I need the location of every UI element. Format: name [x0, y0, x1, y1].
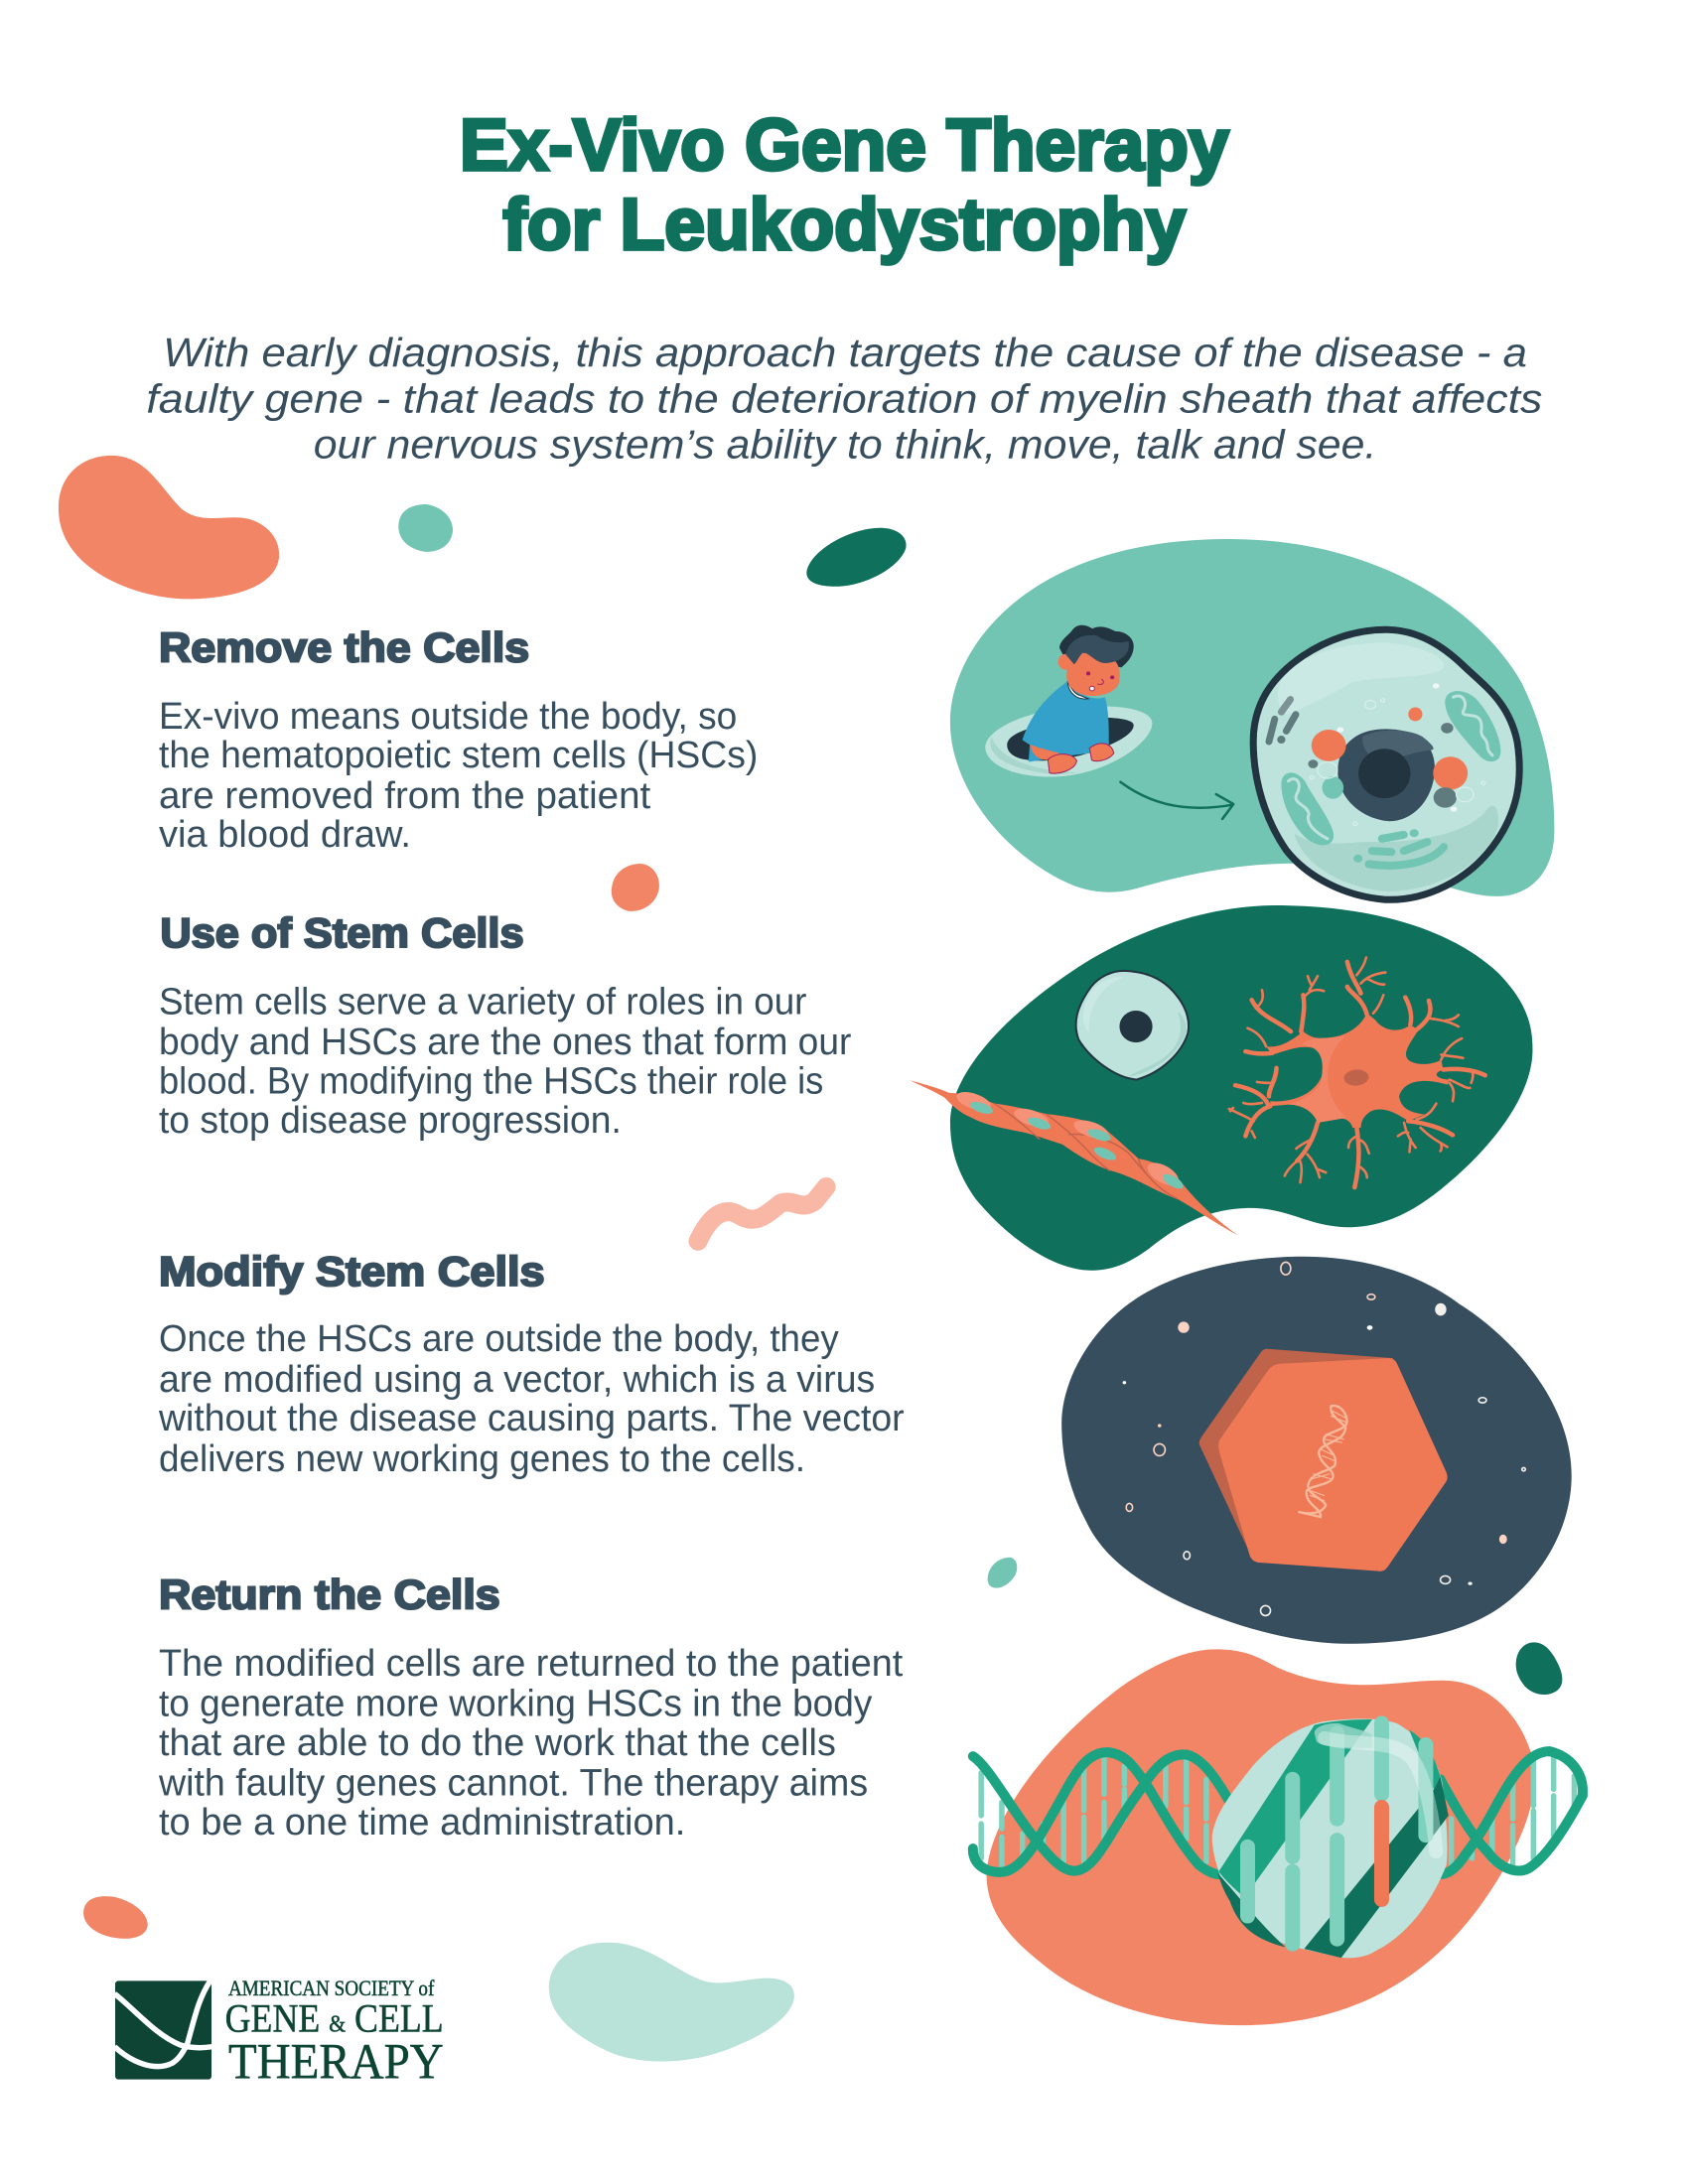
logo icon: [114, 1980, 211, 2080]
navy blob: [1061, 1257, 1572, 1644]
illustration: orange blob with DNA and lens: [973, 1649, 1583, 2025]
animal cell: [1253, 629, 1519, 899]
DNA strands: [973, 1751, 1583, 1874]
decorative blob: orange dot: [612, 864, 659, 911]
body text: [158, 1318, 905, 1480]
intro text: With early diagnosis, this approach targets the cause of the disease - a: [163, 330, 1527, 375]
body text: Once the HSCs are outside the body, they: [159, 1318, 839, 1360]
dark green blob: [950, 905, 1532, 1271]
specks: [1123, 1262, 1525, 1615]
title: Ex-Vivo Gene Therapy: [460, 105, 1229, 186]
muscle cell: [910, 1080, 1238, 1236]
body text: The modified cells are returned to the patient: [159, 1643, 904, 1685]
body text: are modified using a vector, which is a virus: [159, 1359, 875, 1401]
magnifying lens: [1212, 1718, 1449, 1958]
body text: with faulty genes cannot. The therapy aims: [158, 1763, 868, 1805]
heading: Use of Stem Cells: [160, 909, 524, 956]
logo: American Society of Gene & Cell Therapy: [114, 1976, 444, 2089]
body text: the hematopoietic stem cells (HSCs): [159, 735, 758, 776]
body text: Stem cells serve a variety of roles in our: [159, 982, 806, 1024]
logo wordmark: THERAPY: [228, 2033, 444, 2089]
mini DNA: [1299, 1406, 1347, 1517]
DNA rungs: [981, 1758, 1574, 1866]
decorative blob: orange top left: [59, 456, 279, 599]
logo wordmark: GENE & CELL: [225, 1997, 444, 2041]
body text: to stop disease progression.: [159, 1100, 622, 1142]
body text: [159, 696, 758, 856]
body text: that are able to do the work that the cells: [159, 1722, 836, 1764]
stem cell: [1076, 971, 1189, 1080]
intro text: [146, 330, 1542, 468]
title: [460, 105, 1229, 265]
logo wordmark: AMERICAN SOCIETY of: [228, 1976, 435, 2000]
hexagon capsid: [1218, 1358, 1448, 1571]
decorative blob: dark green right: [1516, 1642, 1562, 1695]
body text: via blood draw.: [159, 814, 411, 856]
decorative blob: small teal lower: [988, 1558, 1017, 1588]
heading: Return the Cells: [159, 1571, 500, 1618]
title: for Leukodystrophy: [503, 185, 1187, 265]
body text: Ex-vivo means outside the body, so: [159, 696, 737, 738]
heading: Modify Stem Cells: [159, 1248, 545, 1295]
decorative blob: small teal: [398, 504, 453, 552]
arrow: [1120, 782, 1233, 819]
text block: Remove the Cells: [159, 624, 758, 856]
body text: body and HSCs are the ones that form our: [159, 1022, 851, 1063]
text block: Return the Cells: [158, 1571, 904, 1843]
intro text: faulty gene - that leads to the deterioration of myelin sheath that affects: [146, 375, 1542, 421]
body text: delivers new working genes to the cells.: [159, 1438, 805, 1480]
body text: without the disease causing parts. The vector: [158, 1398, 905, 1439]
body text: [158, 1643, 904, 1843]
logo wordmark: [225, 1976, 444, 2089]
decorative blob: pale teal bottom: [549, 1943, 794, 2062]
intro text: our nervous system’s ability to think, move, talk and see.: [314, 422, 1376, 468]
body text: are removed from the patient: [159, 775, 651, 817]
illustration: teal blob with patient and cell: [950, 539, 1554, 899]
body text: to generate more working HSCs in the body: [159, 1684, 872, 1725]
text block: Modify Stem Cells: [158, 1248, 905, 1480]
neuron: [1229, 958, 1485, 1187]
illustration: dark green blob with stem cell, muscle cell and neuron: [910, 905, 1532, 1271]
body text: [159, 982, 851, 1142]
body text: to be a one time administration.: [159, 1802, 685, 1843]
orange blob: [987, 1649, 1535, 2025]
hexagon shadow: [1199, 1349, 1393, 1562]
body text: blood. By modifying the HSCs their role is: [159, 1061, 823, 1103]
illustration: navy blob with vector capsid: [1061, 1257, 1572, 1644]
text block: Use of Stem Cells: [159, 909, 851, 1142]
heading: Remove the Cells: [159, 624, 529, 671]
teal blob: [950, 539, 1554, 896]
decorative squiggle: [698, 1187, 826, 1241]
patient emerging from hole: [985, 625, 1152, 777]
decorative blob: orange lower left: [83, 1896, 148, 1939]
decorative blob: dark green: [806, 528, 907, 587]
